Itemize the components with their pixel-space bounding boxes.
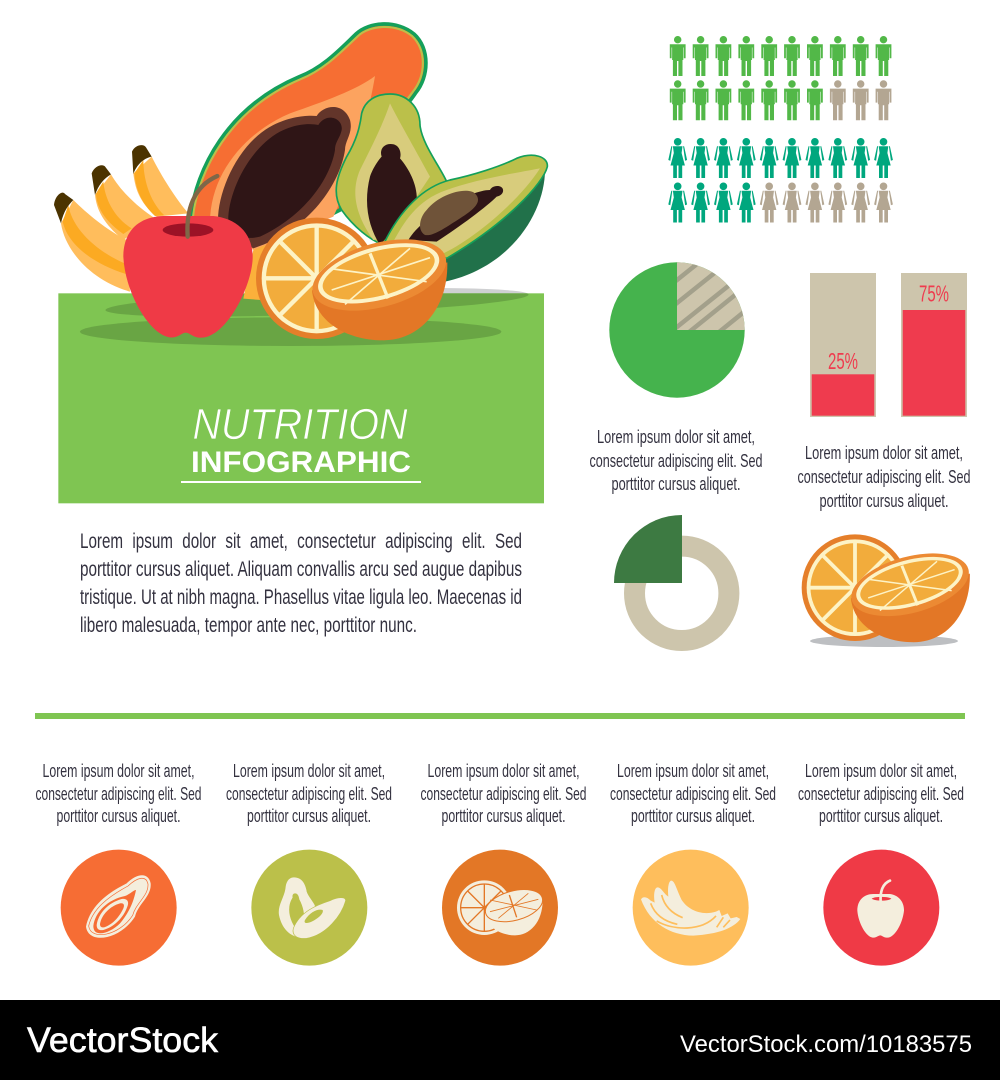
title line: nutrition: NUTRITION: [192, 400, 408, 449]
column text 4: porttitor cursus aliquet.: [631, 806, 755, 826]
column text 1: [36, 761, 202, 826]
pie caption: consectetur adipiscing elit. Sed: [590, 451, 762, 471]
intro paragraph: porttitor cursus aliquet. Aliquam convallis arcu sed augue dapibus: [80, 558, 522, 581]
donut chart: [614, 515, 729, 640]
column text 3: porttitor cursus aliquet.: [442, 806, 566, 826]
column text 2: Lorem ipsum dolor sit amet,: [233, 761, 385, 781]
title: [181, 400, 421, 483]
pie caption: [590, 427, 762, 494]
column text 3: Lorem ipsum dolor sit amet,: [428, 761, 580, 781]
papaya: [191, 24, 426, 250]
column text 1: porttitor cursus aliquet.: [56, 806, 180, 826]
panel shadow lower: [80, 317, 501, 346]
column text 3: consectetur adipiscing elit. Sed: [420, 784, 586, 804]
divider: [35, 713, 965, 719]
bar chart 75%: [901, 273, 967, 417]
column text 4: consectetur adipiscing elit. Sed: [610, 784, 776, 804]
column text 1: Lorem ipsum dolor sit amet,: [42, 761, 194, 781]
column text 1: consectetur adipiscing elit. Sed: [36, 784, 202, 804]
column text 5: porttitor cursus aliquet.: [819, 806, 943, 826]
panel shadow upper: [106, 293, 528, 316]
icon: orange: [442, 850, 558, 966]
bananas: [54, 145, 280, 301]
orange shadow: [810, 635, 958, 647]
green title panel: [58, 293, 544, 503]
bar caption: porttitor cursus aliquet.: [820, 491, 948, 511]
orange illustration: [802, 534, 976, 647]
icon: apple: [823, 850, 939, 966]
footer url: VectorStock.com/10183575: [680, 1031, 972, 1058]
gray ground shadow: [105, 283, 529, 322]
column text 4: [610, 761, 776, 826]
footer logo: VectorStock: [27, 1021, 219, 1060]
column text 2: porttitor cursus aliquet.: [247, 806, 371, 826]
apple: [123, 176, 253, 338]
intro paragraph: tristique. Ut at nibh magna. Phasellus vitae ligula leo. Maecenas id: [80, 586, 522, 609]
pie chart: [609, 262, 745, 398]
pictogram: women: [668, 138, 893, 222]
pictogram: men: [670, 36, 891, 120]
column text 2: [226, 761, 392, 826]
bar chart 75%: 75%: [919, 280, 949, 306]
column text 2: consectetur adipiscing elit. Sed: [226, 784, 392, 804]
bar chart 25%: [810, 273, 876, 417]
upright avocado: [336, 94, 447, 245]
icon: banana: [633, 850, 749, 966]
hero orange: [256, 218, 454, 340]
bar caption: [798, 443, 970, 511]
pie caption: porttitor cursus aliquet.: [612, 474, 740, 494]
column text 4: Lorem ipsum dolor sit amet,: [617, 761, 769, 781]
intro paragraph: libero malesuada, tempor ante nec, porttitor nunc.: [80, 614, 417, 637]
column text 3: [420, 761, 586, 826]
orange fruit: [802, 534, 976, 642]
title line: infographic: INFOGRAPHIC: [191, 446, 411, 479]
footer bar: [0, 1000, 1000, 1080]
lying avocado: [384, 155, 547, 282]
intro paragraph: Lorem ipsum dolor sit amet, consectetur adipiscing elit. Sed: [80, 530, 522, 553]
column text 5: [798, 761, 964, 826]
icon: avocado: [251, 850, 367, 966]
title underline: [181, 481, 421, 483]
icon: papaya: [61, 850, 177, 966]
pie caption: Lorem ipsum dolor sit amet,: [597, 427, 755, 447]
intro paragraph: [80, 530, 522, 637]
hero illustration: fruit on green panel: [54, 24, 547, 503]
bar chart 25%: 25%: [828, 348, 858, 374]
